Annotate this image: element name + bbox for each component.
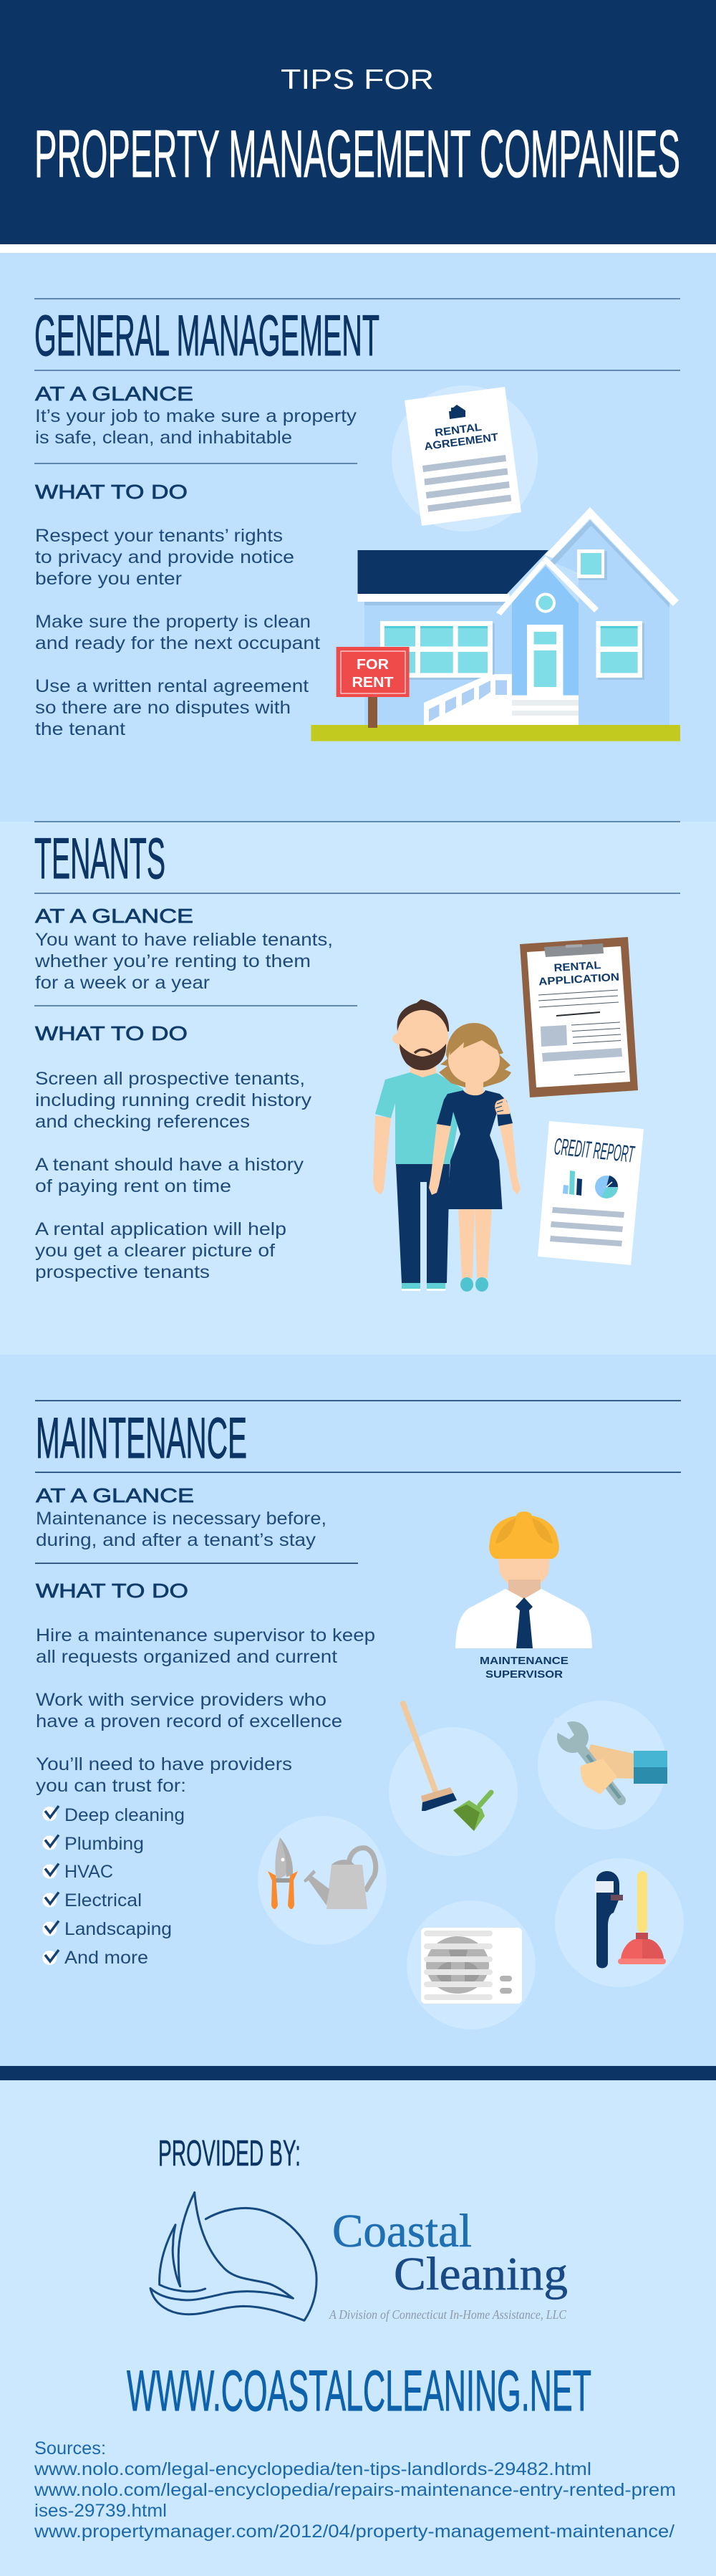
heading: at a glance: AT A GLANCE	[35, 383, 193, 405]
text block: at a glance: during, and after a tenant’s stay	[36, 1530, 316, 1550]
dormer window	[579, 551, 607, 580]
illustration: woman	[429, 1023, 521, 1292]
round window	[537, 595, 554, 612]
text block: at a glance: You want to have reliable tenants,	[35, 930, 333, 950]
text block: what to do: A tenant should have a history	[35, 1155, 304, 1175]
sources: www.nolo.com/legal-encyclopedia/ten-tips-landlords-29482.html	[34, 2459, 591, 2479]
door	[527, 625, 563, 696]
icon: hand with wrench	[538, 1701, 667, 1830]
checklist of services: And more	[64, 1948, 148, 1968]
panel: general management	[0, 253, 716, 822]
checklist of services: Plumbing	[64, 1834, 144, 1854]
logo: wordmark coastal cleaning	[329, 2205, 568, 2322]
icon: rental agreement document: RENTAL	[434, 421, 483, 439]
label: maintenance supervisor	[480, 1655, 569, 1681]
pie chart	[595, 1176, 618, 1198]
text block: what to do: of paying rent on time	[35, 1176, 231, 1196]
chart bars	[563, 1171, 582, 1196]
text block: what to do: Use a written rental agreement	[35, 676, 309, 696]
heading: maintenance: MAINTENANCE	[36, 1406, 247, 1471]
illustration: man	[373, 999, 463, 1291]
sources: Sources:	[34, 2438, 106, 2459]
checklist of services: Deep cleaning	[64, 1805, 185, 1825]
icon: credit report document	[538, 1121, 644, 1265]
sources	[34, 2438, 676, 2542]
ramp railing	[424, 674, 512, 725]
text block: what to do: Work with service providers who	[36, 1690, 326, 1710]
panel: maintenance	[0, 1355, 716, 2066]
icon: rental agreement document	[392, 385, 538, 532]
right window	[598, 623, 644, 680]
label: maintenance supervisor: SUPERVISOR	[485, 1668, 563, 1681]
text block: at a glance: for a week or a year	[35, 973, 210, 993]
text block: what to do	[36, 1625, 375, 1796]
text block: what to do: you get a clearer picture of	[35, 1241, 275, 1261]
heading: at a glance: AT A GLANCE	[35, 905, 193, 927]
heading: what to do: WHAT TO DO	[36, 1580, 188, 1602]
sources: www.nolo.com/legal-encyclopedia/repairs-maintenance-entry-rented-prem	[34, 2480, 676, 2500]
ground	[311, 725, 680, 741]
icon: broom and dustpan	[389, 1703, 518, 1856]
main window	[382, 623, 495, 680]
heading: what to do: WHAT TO DO	[35, 481, 188, 503]
subtitle: tips for: TIPS FOR	[281, 64, 434, 95]
text block: what to do	[35, 526, 320, 739]
text block: at a glance: Maintenance is necessary before,	[36, 1509, 326, 1529]
for rent sign: RENT	[352, 675, 394, 691]
text block: at a glance: It’s your job to make sure a property	[35, 406, 357, 426]
footer divider bar	[0, 2066, 716, 2080]
text block: what to do: You’ll need to have providers	[36, 1754, 292, 1774]
logo: wordmark coastal cleaning: A Division of Connecticut In-Home Assistance, LLC	[329, 2307, 567, 2322]
text block: what to do: all requests organized and current	[36, 1647, 337, 1667]
icon: rental application clipboard: RENTAL	[553, 959, 601, 974]
icon: air conditioning unit	[407, 1900, 536, 2029]
text block: at a glance	[34, 930, 333, 993]
icon: rental application clipboard: APPLICATION	[538, 971, 619, 988]
logo: wordmark coastal cleaning: Cleaning	[394, 2248, 568, 2300]
text block: what to do: A rental application will help	[35, 1219, 286, 1239]
checklist of services: Landscaping	[64, 1919, 172, 1939]
logo: wordmark coastal cleaning: Coastal	[332, 2205, 472, 2257]
icon: pipe wrench and plunger	[555, 1858, 684, 1987]
gable trim	[545, 507, 679, 606]
icon: rental application clipboard	[520, 937, 638, 1097]
text block: what to do: to privacy and provide notice	[35, 547, 294, 567]
text block: what to do: and checking references	[35, 1112, 250, 1132]
text block: at a glance	[36, 1509, 326, 1550]
panel: tenants	[0, 821, 716, 1355]
panel: provided by	[0, 2080, 716, 2576]
text block: what to do: you can trust for:	[36, 1776, 186, 1796]
text block: at a glance	[35, 406, 357, 448]
checklist of services: Electrical	[64, 1890, 142, 1911]
heading: provided by: PROVIDED BY:	[158, 2133, 301, 2173]
for rent sign	[337, 647, 410, 728]
text block: what to do: before you enter	[35, 569, 182, 589]
steps	[512, 696, 579, 725]
label: maintenance supervisor: MAINTENANCE	[480, 1655, 569, 1667]
text block: what to do: Respect your tenants’ rights	[35, 526, 283, 546]
text block: what to do: and ready for the next occupant	[35, 633, 320, 653]
sources: www.propertymanager.com/2012/04/property-management-maintenance/	[34, 2522, 674, 2542]
text block: what to do: the tenant	[35, 719, 125, 739]
logo: sailboat mark	[150, 2193, 316, 2320]
text block: what to do: have a proven record of excellence	[36, 1711, 342, 1731]
text block: what to do: including running credit history	[35, 1090, 312, 1110]
header banner	[0, 0, 716, 244]
checklist of services	[42, 1805, 185, 1968]
text block: what to do: Make sure the property is clean	[35, 612, 311, 632]
icon: rental agreement document: AGREEMENT	[424, 431, 499, 453]
illustration: maintenance supervisor	[455, 1512, 592, 1681]
heading: at a glance: AT A GLANCE	[36, 1484, 194, 1506]
illustration: house with for rent sign	[311, 507, 680, 741]
text block: what to do	[35, 1069, 312, 1282]
for rent sign: FOR	[357, 657, 390, 673]
text block: what to do: Hire a maintenance supervisor to keep	[36, 1625, 375, 1645]
text block: at a glance: is safe, clean, and inhabitable	[35, 428, 292, 448]
text block: what to do: prospective tenants	[35, 1262, 210, 1282]
text block: what to do: Screen all prospective tenants,	[35, 1069, 305, 1089]
checklist of services: HVAC	[64, 1862, 113, 1882]
icon: pruners and watering can	[258, 1816, 387, 1945]
text block: what to do: so there are no disputes with	[35, 698, 291, 718]
sources: ises-29739.html	[34, 2501, 167, 2521]
text block: at a glance: whether you’re renting to them	[34, 951, 311, 971]
heading: what to do: WHAT TO DO	[35, 1022, 188, 1044]
panel: tenants: TENANTS	[34, 827, 165, 891]
